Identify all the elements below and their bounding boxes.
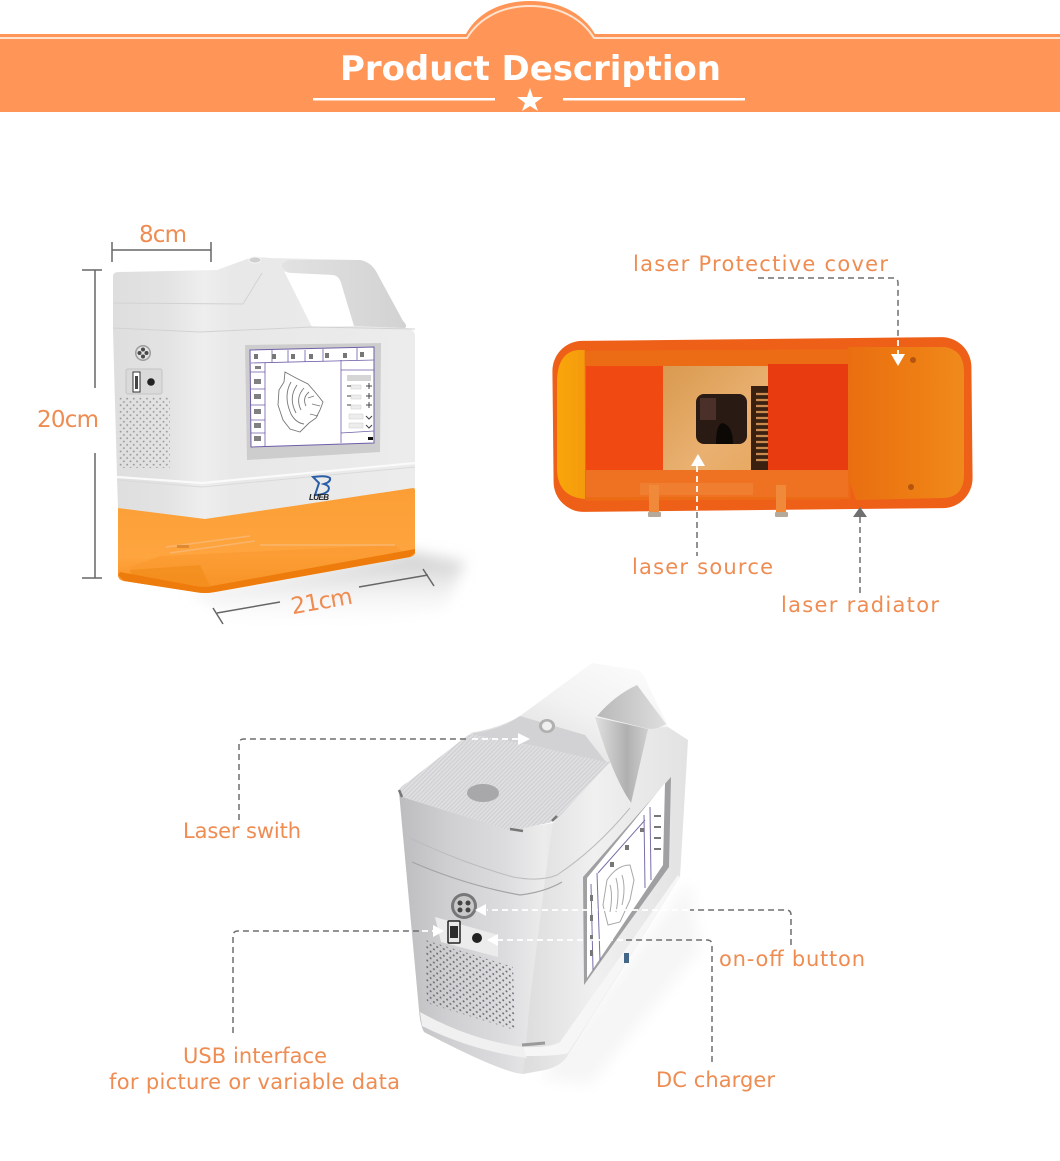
- screen: [583, 777, 671, 985]
- red panes: [586, 366, 663, 470]
- knob: [135, 345, 151, 361]
- seams: [410, 808, 630, 879]
- handle recess: [595, 717, 648, 803]
- callout: on-off button: [475, 904, 865, 971]
- callout: usb interface: [109, 925, 444, 1094]
- silver base band: [420, 1012, 527, 1058]
- callout: usb interface: USB interface: [183, 1044, 327, 1068]
- top face: [399, 734, 610, 830]
- bottom logo: [624, 953, 629, 963]
- tiger drawing: [603, 865, 634, 925]
- main body with handle silhouette: [113, 257, 415, 520]
- callout: laser source: [632, 454, 773, 579]
- silver corners: [399, 790, 557, 831]
- touch screen: [245, 343, 381, 460]
- left amber strip: [557, 350, 585, 499]
- callout: on-off button: on-off button: [719, 947, 865, 971]
- handle button: [249, 257, 261, 263]
- inner frame: [585, 349, 850, 501]
- on-off knob: [451, 893, 477, 919]
- speaker grille: [425, 940, 515, 1030]
- callout: laser radiator: [781, 507, 939, 617]
- handle top: [470, 663, 667, 763]
- dimension: 8cm: 8cm: [139, 222, 187, 248]
- product: rear three-quarter view: [399, 663, 700, 1085]
- ribbon connector: [751, 386, 768, 470]
- product: front view with dimensions: [113, 257, 465, 632]
- right cover section: [848, 347, 964, 500]
- soft shadow: [540, 880, 700, 1085]
- handle column: [597, 685, 666, 729]
- dimension: 21cm: 21cm: [289, 584, 355, 620]
- gold panel: [663, 366, 768, 470]
- callout: dc charger: [487, 934, 775, 1092]
- callout: laser source: laser source: [632, 555, 773, 579]
- dimension: 20cm: 20cm: [37, 407, 99, 433]
- floor shadow: [190, 553, 465, 632]
- product: laser protective cover view: [552, 337, 973, 517]
- right face: [520, 727, 688, 1074]
- title: Product Description: [340, 49, 721, 89]
- speaker grille: [119, 397, 170, 468]
- dimension: 8cm: [112, 222, 211, 262]
- callout: dc charger: DC charger: [656, 1068, 775, 1092]
- callout: laser radiator: laser radiator: [781, 593, 939, 617]
- callout: laser protective cover: [633, 252, 905, 366]
- laser source window: [696, 394, 747, 444]
- icon: star: [517, 88, 543, 111]
- callout: laser switch: [183, 733, 530, 843]
- top cover seams: [113, 273, 415, 332]
- orange cover: [118, 488, 415, 593]
- callout: usb interface: for picture or variable data: [109, 1070, 400, 1094]
- lower translucent strip: [586, 470, 848, 497]
- port panel: [126, 369, 162, 394]
- handle opening: [284, 271, 354, 327]
- logo: LUEB: [309, 493, 329, 502]
- logo mark: [467, 784, 499, 802]
- left face: [399, 792, 553, 1074]
- logo: [309, 476, 330, 502]
- dimension: 21cm: [213, 569, 434, 624]
- header banner: [0, 1, 1060, 112]
- port panel: [435, 917, 498, 957]
- mounting pins: [648, 485, 788, 517]
- handle column: [282, 260, 406, 328]
- tiger drawing: [278, 372, 323, 432]
- callout: laser switch: Laser swith: [183, 819, 301, 843]
- laser switch button: [539, 719, 555, 733]
- callout: laser protective cover: laser Protective cover: [633, 252, 888, 276]
- side highlight seam: [117, 463, 415, 483]
- dimension: 20cm: [37, 270, 102, 578]
